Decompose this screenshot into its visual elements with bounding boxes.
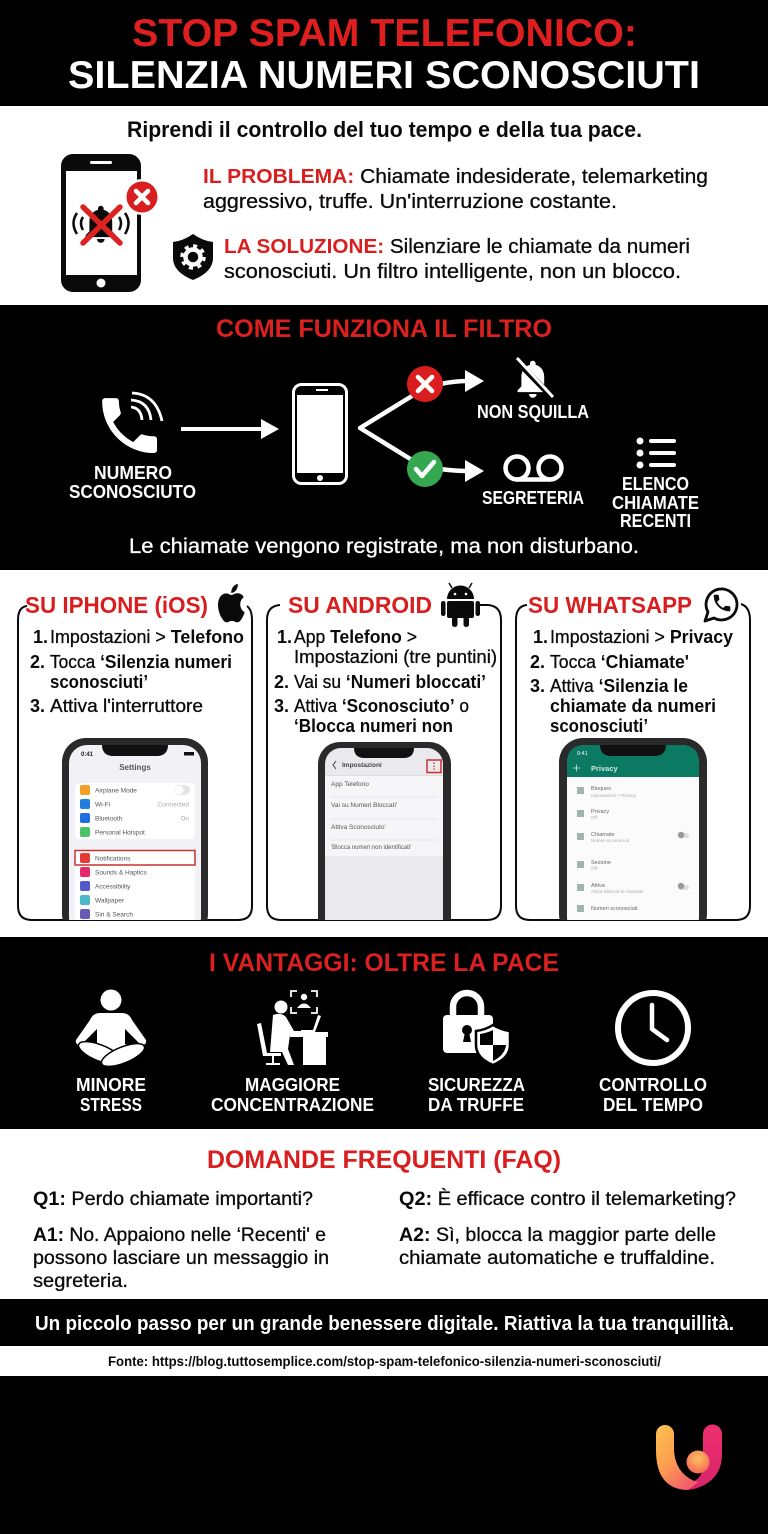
label: recent calls: CHIAMATE xyxy=(612,493,699,513)
phone screenshot: settings: Wi-Fi xyxy=(95,802,110,808)
labels: benefits: CONTROLLO xyxy=(599,1075,707,1095)
phone screenshot: whatsapp privacy: Off xyxy=(591,866,598,871)
phone screenshot: settings: Wallpaper xyxy=(95,898,125,904)
question and answer 2: A2: Sì, blocca la maggior parte delle xyxy=(399,1225,716,1246)
steps: Android: Attiva ‘Sconosciuto’ o xyxy=(294,696,469,716)
panel: WhatsApp xyxy=(516,589,750,938)
phone screenshot: settings: Connected xyxy=(158,802,189,808)
icon: silenced phone xyxy=(61,154,160,292)
icon: focus at desk xyxy=(257,991,328,1065)
labels: benefits: CONCENTRAZIONE xyxy=(211,1095,374,1115)
phone screenshot: whatsapp privacy: Attiva Silenzia le chiamate xyxy=(591,889,644,894)
panel: benefits xyxy=(76,949,707,1115)
panel: instructions background xyxy=(0,570,768,937)
question and answer 1: segreteria. xyxy=(33,1271,128,1292)
steps: iPhone: sconosciuti’ xyxy=(50,672,148,692)
icon: meditation xyxy=(76,990,147,1071)
label: recent calls: RECENTI xyxy=(620,511,691,531)
steps: Android: 2. xyxy=(274,672,289,692)
problem text xyxy=(203,166,708,213)
phone screenshot: settings: Personal Hotspot xyxy=(95,830,145,836)
steps: WhatsApp: 2. xyxy=(530,652,545,672)
heading: COME FUNZIONA IL FILTRO xyxy=(216,315,552,343)
subtitle: Riprendi il controllo del tuo tempo e della tua pace. xyxy=(127,117,642,142)
labels: benefits: MAGGIORE xyxy=(245,1075,340,1095)
icon: rejected xyxy=(407,366,443,402)
title: STOP SPAM TELEFONICO: xyxy=(132,12,637,55)
steps: iPhone: Impostazioni > Telefono xyxy=(50,627,244,647)
label: recent calls xyxy=(612,474,699,531)
question and answer 1: A1: No. Appaiono nelle ‘Recenti' e xyxy=(33,1225,326,1246)
label: does not ring: NON SQUILLA xyxy=(477,402,589,422)
steps: Android: Impostazioni (tre puntini) xyxy=(294,647,497,667)
phone screenshot: whatsapp privacy: Bloqueo xyxy=(591,786,611,792)
labels: benefits: DEL TEMPO xyxy=(603,1095,703,1115)
title xyxy=(68,12,700,97)
source line xyxy=(0,1346,768,1376)
phone screenshot: settings: Bluetooth xyxy=(95,816,123,822)
labels: benefits: MINORE xyxy=(76,1075,146,1095)
icon: apple xyxy=(218,584,245,622)
labels: benefits: SICUREZZA xyxy=(428,1075,525,1095)
source line: Fonte: https://blog.tuttosemplice.com/stop-spam-telefonico-silenzia-numeri-sconosciuti/ xyxy=(108,1353,661,1369)
labels: benefits: STRESS xyxy=(80,1095,142,1115)
icon: voicemail xyxy=(506,456,562,480)
phone screenshot: settings: Sounds & Haptics xyxy=(95,870,147,876)
phone screenshot: settings: Settings xyxy=(119,763,151,772)
steps: WhatsApp: Attiva ‘Silenzia le xyxy=(550,676,688,696)
steps: WhatsApp: Impostazioni > Privacy xyxy=(550,627,733,647)
icon: accepted xyxy=(407,451,443,487)
panel: how the filter works xyxy=(69,315,699,558)
label: unknown number: SCONOSCIUTO xyxy=(69,482,196,502)
icon: incoming call xyxy=(102,393,162,453)
phone screenshot: android settings: App Telefono xyxy=(331,781,369,788)
phone screenshot: android settings xyxy=(318,742,451,920)
steps: iPhone: Tocca ‘Silenzia numeri xyxy=(50,652,232,672)
steps: iPhone: 1. xyxy=(33,627,48,647)
steps: WhatsApp: 1. xyxy=(533,627,548,647)
heading: benefits: I VANTAGGI: OLTRE LA PACE xyxy=(209,949,559,977)
solution text: sconosciuti. Un filtro intelligente, non un blocco. xyxy=(224,261,681,283)
heading: FAQ: DOMANDE FREQUENTI (FAQ) xyxy=(207,1146,561,1174)
problem text: IL PROBLEMA: Chiamate indesiderate, telemarketing xyxy=(203,166,708,188)
steps: Android xyxy=(274,627,497,736)
steps: Android: 1. xyxy=(277,627,292,647)
phone screenshot: settings: Accessibility xyxy=(95,884,131,890)
phone screenshot: settings: On xyxy=(180,816,189,822)
title: SILENZIA NUMERI SCONOSCIUTI xyxy=(68,54,700,97)
icon: lock and shield xyxy=(443,993,510,1065)
steps: Android: 3. xyxy=(274,696,289,716)
question and answer 1: possono lasciare un messaggio in xyxy=(33,1248,329,1269)
panel: Android xyxy=(267,583,501,942)
solution text: LA SOLUZIONE: Silenziare le chiamate da numeri xyxy=(224,236,690,258)
label: unknown number xyxy=(69,463,196,502)
panel: iPhone xyxy=(18,584,252,938)
steps: WhatsApp: sconosciuti’ xyxy=(550,716,648,736)
heading: Android: SU ANDROID xyxy=(288,592,432,618)
steps: iPhone: 3. xyxy=(30,696,45,716)
steps: iPhone: Attiva l'interruttore xyxy=(50,696,203,716)
phone screenshot: whatsapp privacy: Privacy xyxy=(591,809,609,815)
icon: clock xyxy=(618,993,688,1063)
phone screenshot: android settings: Impostazioni xyxy=(342,762,382,769)
phone screenshot: settings: Siri & Search xyxy=(95,912,133,918)
heading: iPhone: SU IPHONE (iOS) xyxy=(25,592,208,618)
caption: Le chiamate vengono registrate, ma non disturbano. xyxy=(129,535,639,558)
phone screenshot: settings xyxy=(62,738,208,938)
phone screenshot: whatsapp privacy xyxy=(559,738,707,938)
phone screenshot: whatsapp privacy: Numeri sconosciuti xyxy=(591,838,629,843)
phone screenshot: settings: Airplane Mode xyxy=(95,788,137,794)
problem text: aggressivo, truffe. Un'interruzione costante. xyxy=(203,191,617,213)
logo xyxy=(656,1424,722,1490)
icon: recent list xyxy=(636,438,676,468)
phone screenshot: settings: Notifications xyxy=(95,856,131,862)
label: recent calls: ELENCO xyxy=(622,474,689,494)
labels: benefits: DA TRUFFE xyxy=(428,1095,524,1115)
heading: WhatsApp: SU WHATSAPP xyxy=(528,592,692,618)
icon: muted bell xyxy=(515,358,553,398)
phone screenshot: settings: 0:41 xyxy=(81,752,94,758)
label: unknown number: NUMERO xyxy=(94,463,172,483)
phone screenshot: whatsapp privacy: Sezione xyxy=(591,860,611,866)
phone screenshot: android settings: Attiva Sconosciuto' xyxy=(331,824,386,831)
steps: Android: Vai su ‘Numeri bloccati’ xyxy=(294,672,486,692)
icon: whatsapp xyxy=(705,589,737,621)
icon: shield with gear xyxy=(173,234,213,280)
question and answer 2: chiamate automatiche e truffaldine. xyxy=(399,1248,715,1269)
steps: WhatsApp: chiamate da numeri xyxy=(550,696,716,716)
phone screenshot: android settings: Vai su Numeri Bloccati' xyxy=(331,802,397,809)
phone screenshot: whatsapp privacy: Attiva xyxy=(591,883,606,889)
closing banner: Un piccolo passo per un grande benessere digitale. Riattiva la tua tranquillità. xyxy=(35,1313,734,1335)
steps: WhatsApp: 3. xyxy=(530,676,545,696)
arrow xyxy=(181,419,279,439)
phone screenshot: whatsapp privacy: 0:41 xyxy=(577,751,588,757)
phone screenshot: whatsapp privacy: Chiamate xyxy=(591,832,615,838)
solution text xyxy=(224,236,690,283)
steps: Android: ‘Blocca numeri non xyxy=(294,716,453,736)
phone screenshot: whatsapp privacy: Privacy xyxy=(591,764,619,773)
question and answer 1: Q1: Perdo chiamate importanti? xyxy=(33,1189,313,1210)
steps: iPhone xyxy=(30,627,244,716)
question and answer 2: Q2: È efficace contro il telemarketing? xyxy=(399,1189,736,1210)
icon: phone xyxy=(294,384,346,484)
steps: Android: App Telefono > xyxy=(294,627,417,647)
phone screenshot: whatsapp privacy: Impostazioni > Privacy xyxy=(591,793,637,798)
phone screenshot: whatsapp privacy: Off xyxy=(591,815,598,820)
icon: android xyxy=(441,583,480,627)
phone screenshot: whatsapp privacy: Numeri sconosciuti xyxy=(591,906,637,912)
steps: iPhone: 2. xyxy=(30,652,45,672)
panel: intro problem and solution xyxy=(0,106,768,305)
question and answer 1 xyxy=(33,1189,329,1292)
steps: WhatsApp: Tocca ‘Chiamate' xyxy=(550,652,689,672)
steps: WhatsApp xyxy=(530,627,733,736)
panel: FAQ xyxy=(0,1129,768,1299)
question and answer 2 xyxy=(399,1189,736,1269)
labels: benefits xyxy=(76,1075,707,1115)
fork arrows xyxy=(360,370,484,482)
phone screenshot: android settings: 'Blocca numeri non identificati' xyxy=(331,845,411,851)
label: voicemail: SEGRETERIA xyxy=(482,488,584,508)
